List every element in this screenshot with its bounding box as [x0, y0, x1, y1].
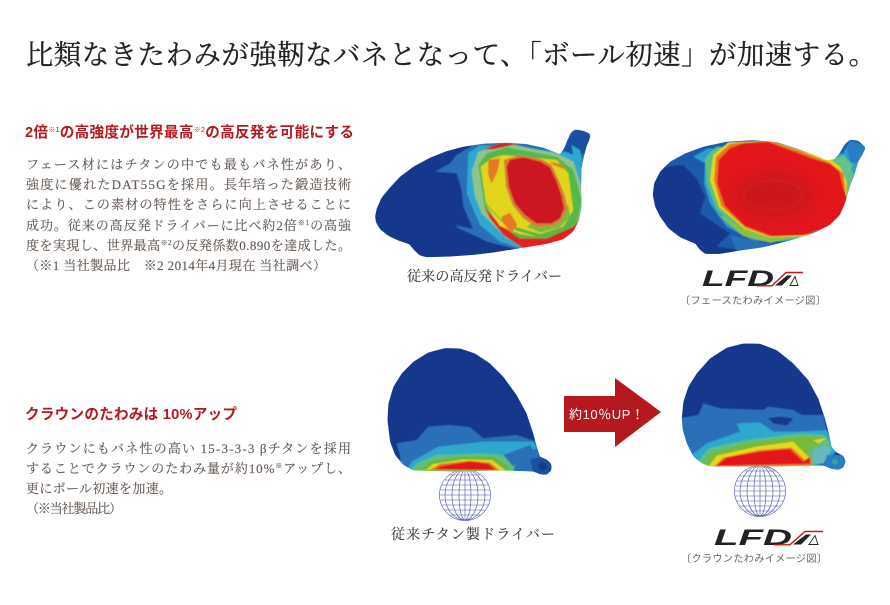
body text: crown: アップし、 — [283, 461, 351, 476]
heading: face: ※1 — [48, 126, 60, 134]
body text: face: の反発係数0.890を達成した。 — [172, 238, 351, 253]
body text: face: （※1 当社製品比 ※2 2014年4月現在 当社調べ） — [26, 258, 326, 273]
body text: crown: ※ — [275, 462, 282, 470]
logo: LFD (crown): LFD — [714, 525, 792, 550]
logo: LFD (crown) — [714, 525, 823, 550]
body text: face: フェース材にはチタンの中でも最もバネ性があり、 — [26, 157, 351, 172]
caption: conventional high-rebound driver: 従来の高反発ドライバー — [407, 268, 562, 285]
body text: crown: クラウンにもバネ性の高い 15-3-3-3 βチタンを採用 — [26, 441, 351, 456]
panel: face rebound text — [25, 123, 354, 273]
body text: face: ※2 — [161, 239, 172, 247]
heading: crown: クラウンのたわみは 10%アップ — [25, 406, 237, 423]
body text: face: ※1 — [298, 219, 310, 227]
body text: face: 度を実現し、世界最高 — [26, 238, 160, 253]
heading: face: 2倍 — [25, 125, 48, 141]
heading: face: の高反発を可能にする — [205, 123, 354, 141]
image: conventional driver face heat map — [375, 130, 590, 258]
title: 比類なきたわみが強靭なバネとなって、「ボール初速」が加速する。 — [26, 40, 876, 70]
arrow: approx 10% up — [564, 378, 661, 447]
caption: conventional titanium driver: 従来チタン製ドライバー — [391, 526, 555, 543]
icon: wireframe ball (conventional) — [440, 470, 490, 520]
body text: face — [26, 157, 352, 273]
arrow: approx 10% up: 約10％UP！ — [569, 407, 644, 422]
body text: crown: （※当社製品比） — [26, 501, 122, 516]
caption: crown deflection image: 〔クラウンたわみイメージ図〕 — [681, 553, 827, 565]
logo: LFD (face): LFD — [702, 266, 774, 291]
icon: wireframe ball (LFD) — [734, 466, 786, 516]
body text: crown — [26, 441, 351, 516]
body text: crown: することでクラウンのたわみ量が約10% — [26, 461, 274, 476]
body text: face: 成功。従来の高反発ドライバーに比べ約2倍 — [26, 218, 297, 233]
logo: LFD (face) — [702, 266, 803, 291]
image: LFD driver face heat map — [652, 140, 866, 254]
heading: face: ※2 — [194, 126, 205, 134]
body text: face: 強度に優れたDAT55Gを採用。長年培った鍛造技術 — [26, 177, 351, 192]
image: LFD crown heat map — [682, 344, 846, 470]
body text: crown: 更にボール初速を加速。 — [26, 481, 172, 496]
image: conventional titanium crown heat map — [388, 348, 552, 475]
heading: face: の高強度が世界最高 — [60, 123, 193, 141]
body text: face: の高強 — [310, 218, 352, 233]
body text: face: により、この素材の特性をさらに向上させることに — [26, 197, 351, 212]
panel: crown text — [25, 406, 351, 516]
caption: face deflection image: 〔フェースたわみイメージ図〕 — [680, 295, 826, 307]
